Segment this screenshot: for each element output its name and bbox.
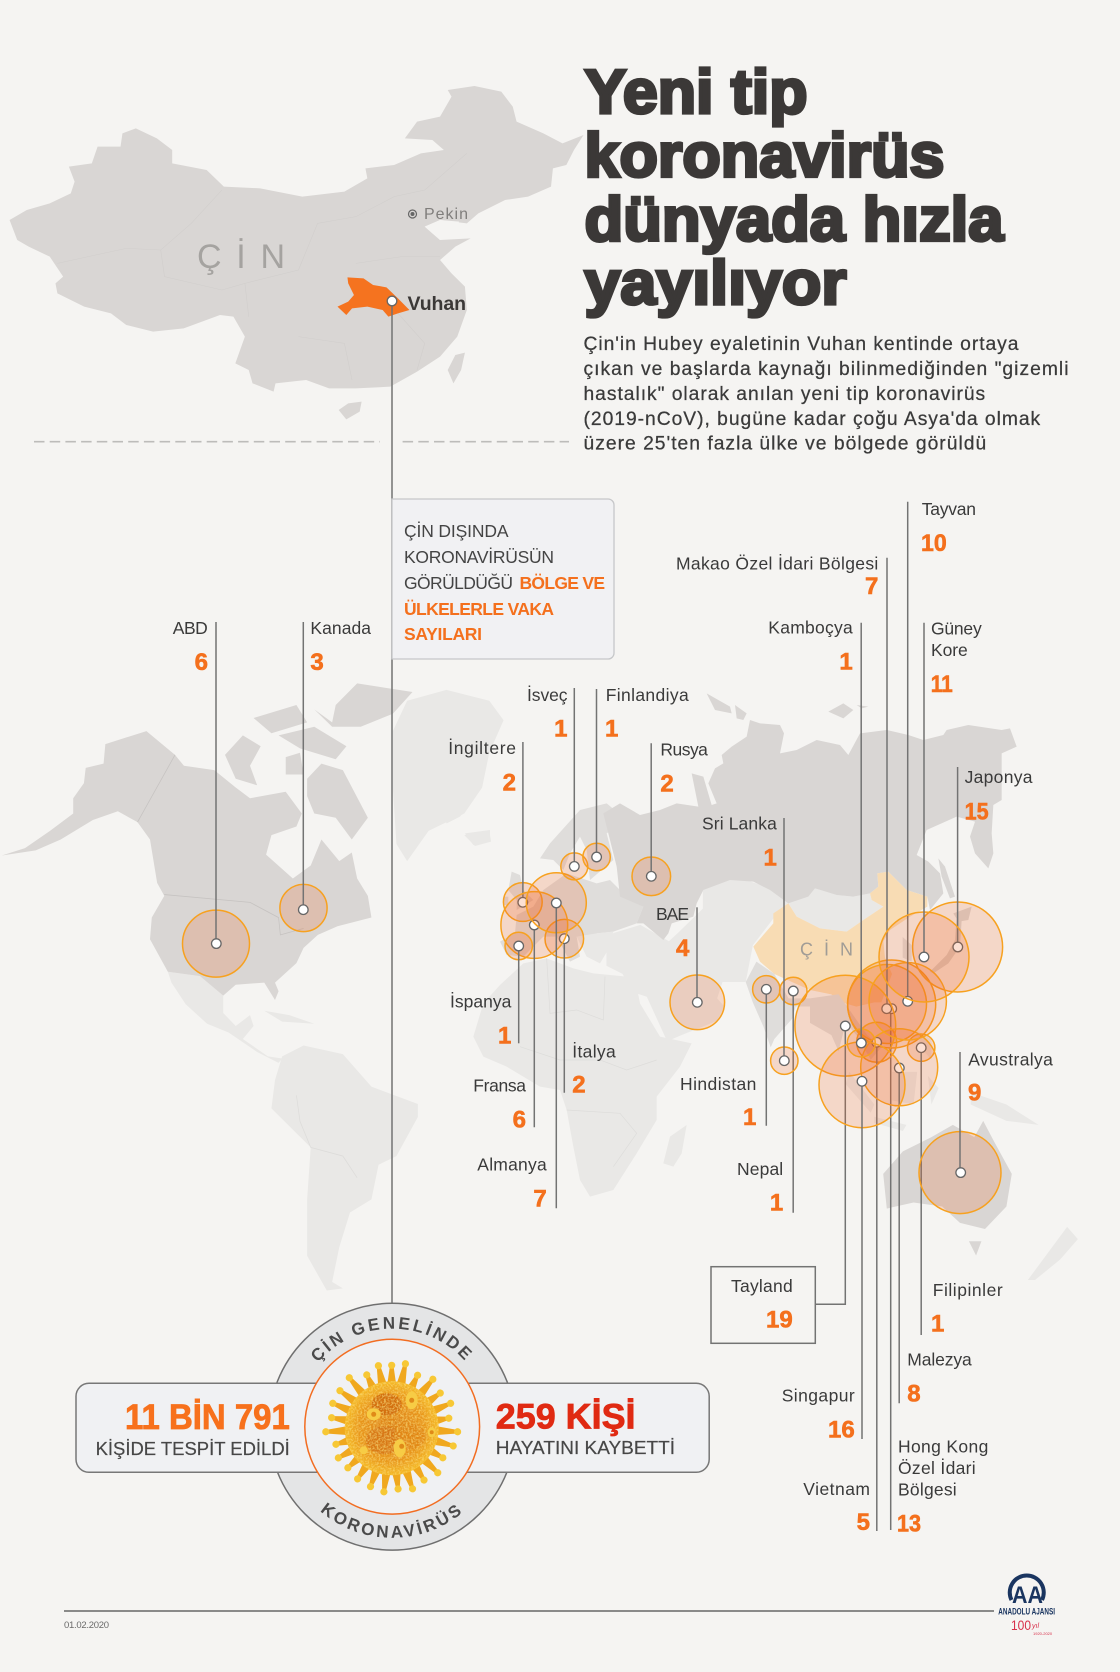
China on world map (753, 872, 927, 1007)
country: Nepal (737, 977, 807, 1217)
country: Hindistan: Hindistan (680, 1074, 756, 1094)
country: Vietnam: Vietnam (803, 1479, 870, 1499)
country: İsveç (527, 685, 588, 880)
country: Güney Kore (879, 618, 982, 1002)
callout: case count heading: GÖRÜLDÜĞÜ (404, 572, 513, 593)
country: Kamboçya: 1 (839, 648, 853, 675)
stat: deaths: 259 KİŞİ (496, 1397, 636, 1436)
intro paragraph: Çin'in Hubey eyaletinin Vuhan kentinde ortaya (584, 334, 1019, 355)
country: Kanada: Kanada (310, 618, 371, 638)
country: ABD: 6 (195, 649, 208, 676)
country: Makao: Makao Özel İdari Bölgesi (676, 553, 878, 573)
map label: Beijing: Pekin (424, 206, 468, 223)
country: Rusya (632, 740, 708, 896)
country: Filipinler: 1 (931, 1311, 944, 1338)
country: İsveç: 1 (554, 715, 568, 742)
logo: Anadolu Ajansı: yıl (1031, 1623, 1039, 1630)
title: dünyada hızla (584, 186, 1004, 255)
country: Kanada: 3 (310, 649, 324, 676)
callout: case count heading: SAYILARI (404, 624, 482, 644)
country: Vietnam (803, 1022, 897, 1536)
title: koronavirüs (584, 122, 944, 191)
inner circle (305, 1339, 480, 1514)
country: Tayland: 19 (766, 1307, 793, 1334)
country: Fransa: Fransa (473, 1076, 526, 1096)
Middle East and Oceania (606, 880, 1078, 1280)
country: Kamboçya (768, 617, 875, 1057)
footer rule (64, 1610, 994, 1612)
Russia, China, Japan (603, 693, 1017, 1007)
Americas (2, 683, 504, 1291)
country: Finlandiya (583, 685, 689, 871)
country: Japonya: 15 (965, 799, 989, 826)
country: İngiltere (448, 738, 542, 921)
country: Fransa (473, 892, 568, 1133)
divider: dashed line (34, 441, 569, 443)
country: Malezya (861, 1029, 972, 1408)
country: Hong Kong: Özel İdari (898, 1458, 976, 1478)
country: Hindistan (680, 976, 780, 1131)
country: Avustralya: Avustralya (968, 1050, 1053, 1070)
map: China with Hubei highlighted (10, 86, 584, 419)
country: İspanya: 1 (498, 1022, 511, 1049)
country: Almanya (477, 873, 586, 1213)
ring text: bottom: KORONAVİRÜS (320, 1502, 461, 1538)
country: Sri Lanka: 1 (763, 845, 777, 872)
logo: Anadolu Ajansı: AA (1012, 1582, 1043, 1609)
country: İspanya: İspanya (450, 991, 512, 1011)
callout: case count heading: BÖLGE VE (520, 573, 605, 593)
country: Nepal: 1 (770, 1190, 783, 1217)
country: Nepal: Nepal (737, 1159, 783, 1179)
country: Makao: 7 (865, 573, 878, 600)
country: Avustralya (919, 1050, 1053, 1214)
country: Makao (676, 553, 926, 1044)
icon: coronavirus (322, 1359, 461, 1496)
stat: deaths: HAYATINI KAYBETTİ (496, 1437, 675, 1458)
marker: Wuhan (387, 296, 397, 306)
leader line: Wuhan to summary badge (391, 301, 393, 1303)
country: Sri Lanka (702, 813, 798, 1074)
country: Filipinler: Filipinler (933, 1280, 1003, 1300)
country: Filipinler (908, 1034, 1003, 1338)
map: world (2, 683, 1078, 1291)
intro paragraph: üzere 25'ten fazla ülke ve bölgede görüldü (584, 433, 986, 454)
country: Tayvan (869, 499, 976, 1040)
country: Rusya: 2 (660, 770, 674, 797)
country: Fransa: 6 (513, 1106, 526, 1133)
country: Kanada (280, 618, 371, 932)
country: Finlandiya: 1 (605, 715, 618, 742)
callout: case count heading: KORONAVİRÜSÜN (404, 547, 554, 567)
intro paragraph: hastalık" olarak anılan yeni tip koronavirüs (584, 384, 985, 405)
country: Kamboçya: Kamboçya (768, 617, 853, 637)
country: Hong Kong: 13 (897, 1511, 921, 1538)
map label: China on world map: Ç İ N (800, 940, 853, 960)
map label: China: Ç İ N (197, 238, 285, 276)
country: Sri Lanka: Sri Lanka (702, 813, 777, 833)
country: Tayvan: Tayvan (922, 499, 976, 519)
country: Finlandiya: Finlandiya (606, 685, 689, 705)
stat: confirmed cases: 11 BİN 791 (125, 1398, 290, 1437)
country: Singapur (782, 1042, 905, 1443)
stat: deaths (496, 1397, 675, 1458)
country: Malezya: Malezya (907, 1350, 972, 1370)
callout: case count heading: ÇİN DIŞINDA (404, 521, 509, 541)
logo: Anadolu Ajansı: ANADOLU AJANSI (998, 1606, 1055, 1618)
stat: confirmed cases (96, 1398, 290, 1459)
country: BAE (656, 904, 725, 1030)
intro paragraph: çıkan ve başlarda kaynağı bilinmediğinden "gizemli (584, 359, 1068, 380)
callout: case count heading (392, 499, 614, 659)
country: Hong Kong (848, 960, 988, 1538)
India and Southeast Asia (746, 962, 881, 1060)
title: Yeni tip (584, 58, 808, 127)
country: Singapur: 16 (828, 1416, 855, 1443)
country: Hindistan: 1 (743, 1104, 756, 1131)
country: Avustralya: 9 (968, 1079, 981, 1106)
logo: Anadolu Ajansı: 1920-2020 (1033, 1631, 1053, 1636)
country: Almanya: Almanya (477, 1155, 547, 1175)
country: Hong Kong: Bölgesi (898, 1480, 957, 1500)
country: İngiltere: 2 (503, 770, 516, 796)
country: Güney Kore: Güney (931, 618, 982, 638)
country: Malezya: 8 (907, 1381, 921, 1408)
country: Hong Kong: Hong Kong (898, 1436, 988, 1456)
Europe and Africa (440, 800, 692, 1197)
country: ABD (173, 618, 250, 977)
summary badge (75, 1302, 710, 1551)
country: Rusya: Rusya (660, 740, 708, 760)
country: Singapur: Singapur (782, 1386, 855, 1406)
country: Tayland: Tayland (731, 1276, 793, 1296)
logo: Anadolu Ajansı: 100 (1011, 1617, 1031, 1633)
country: İngiltere: İngiltere (448, 738, 516, 758)
country: BAE: BAE (656, 904, 689, 924)
country: ABD: ABD (173, 618, 208, 638)
country: İsveç: İsveç (527, 685, 568, 705)
country: Japonya (913, 767, 1033, 992)
label: Wuhan: Vuhan (408, 293, 466, 315)
Hubei province (337, 277, 409, 317)
country: İtalya: İtalya (572, 1041, 616, 1061)
badge ring (269, 1303, 516, 1550)
country: Tayland (711, 975, 896, 1343)
country: Tayvan: 10 (921, 530, 947, 557)
stats bar (76, 1383, 709, 1472)
country: Almanya: 7 (533, 1186, 547, 1213)
title (584, 58, 1004, 318)
country: Güney Kore: Kore (931, 640, 968, 660)
date: 01.02.2020 (64, 1620, 109, 1631)
intro paragraph (584, 334, 1068, 454)
ring text: top: ÇİN GENELİNDE (312, 1317, 472, 1362)
country: Japonya: Japonya (965, 767, 1033, 787)
logo: Anadolu Ajansı (998, 1575, 1055, 1636)
title: yayılıyor (584, 249, 846, 318)
country: Vietnam: 5 (857, 1509, 870, 1536)
stat: confirmed cases: KİŞİDE TESPİT EDİLDİ (96, 1438, 290, 1459)
intro paragraph: (2019-nCoV), bugüne kadar çoğu Asya'da olmak (584, 409, 1041, 430)
callout: case count heading: ÜLKELERLE VAKA (404, 599, 554, 619)
country: İtalya: 2 (572, 1072, 586, 1099)
country: İspanya (450, 932, 532, 1049)
country: Güney Kore: 11 (931, 671, 953, 698)
country: BAE: 4 (676, 935, 690, 962)
country: İtalya (545, 919, 616, 1099)
